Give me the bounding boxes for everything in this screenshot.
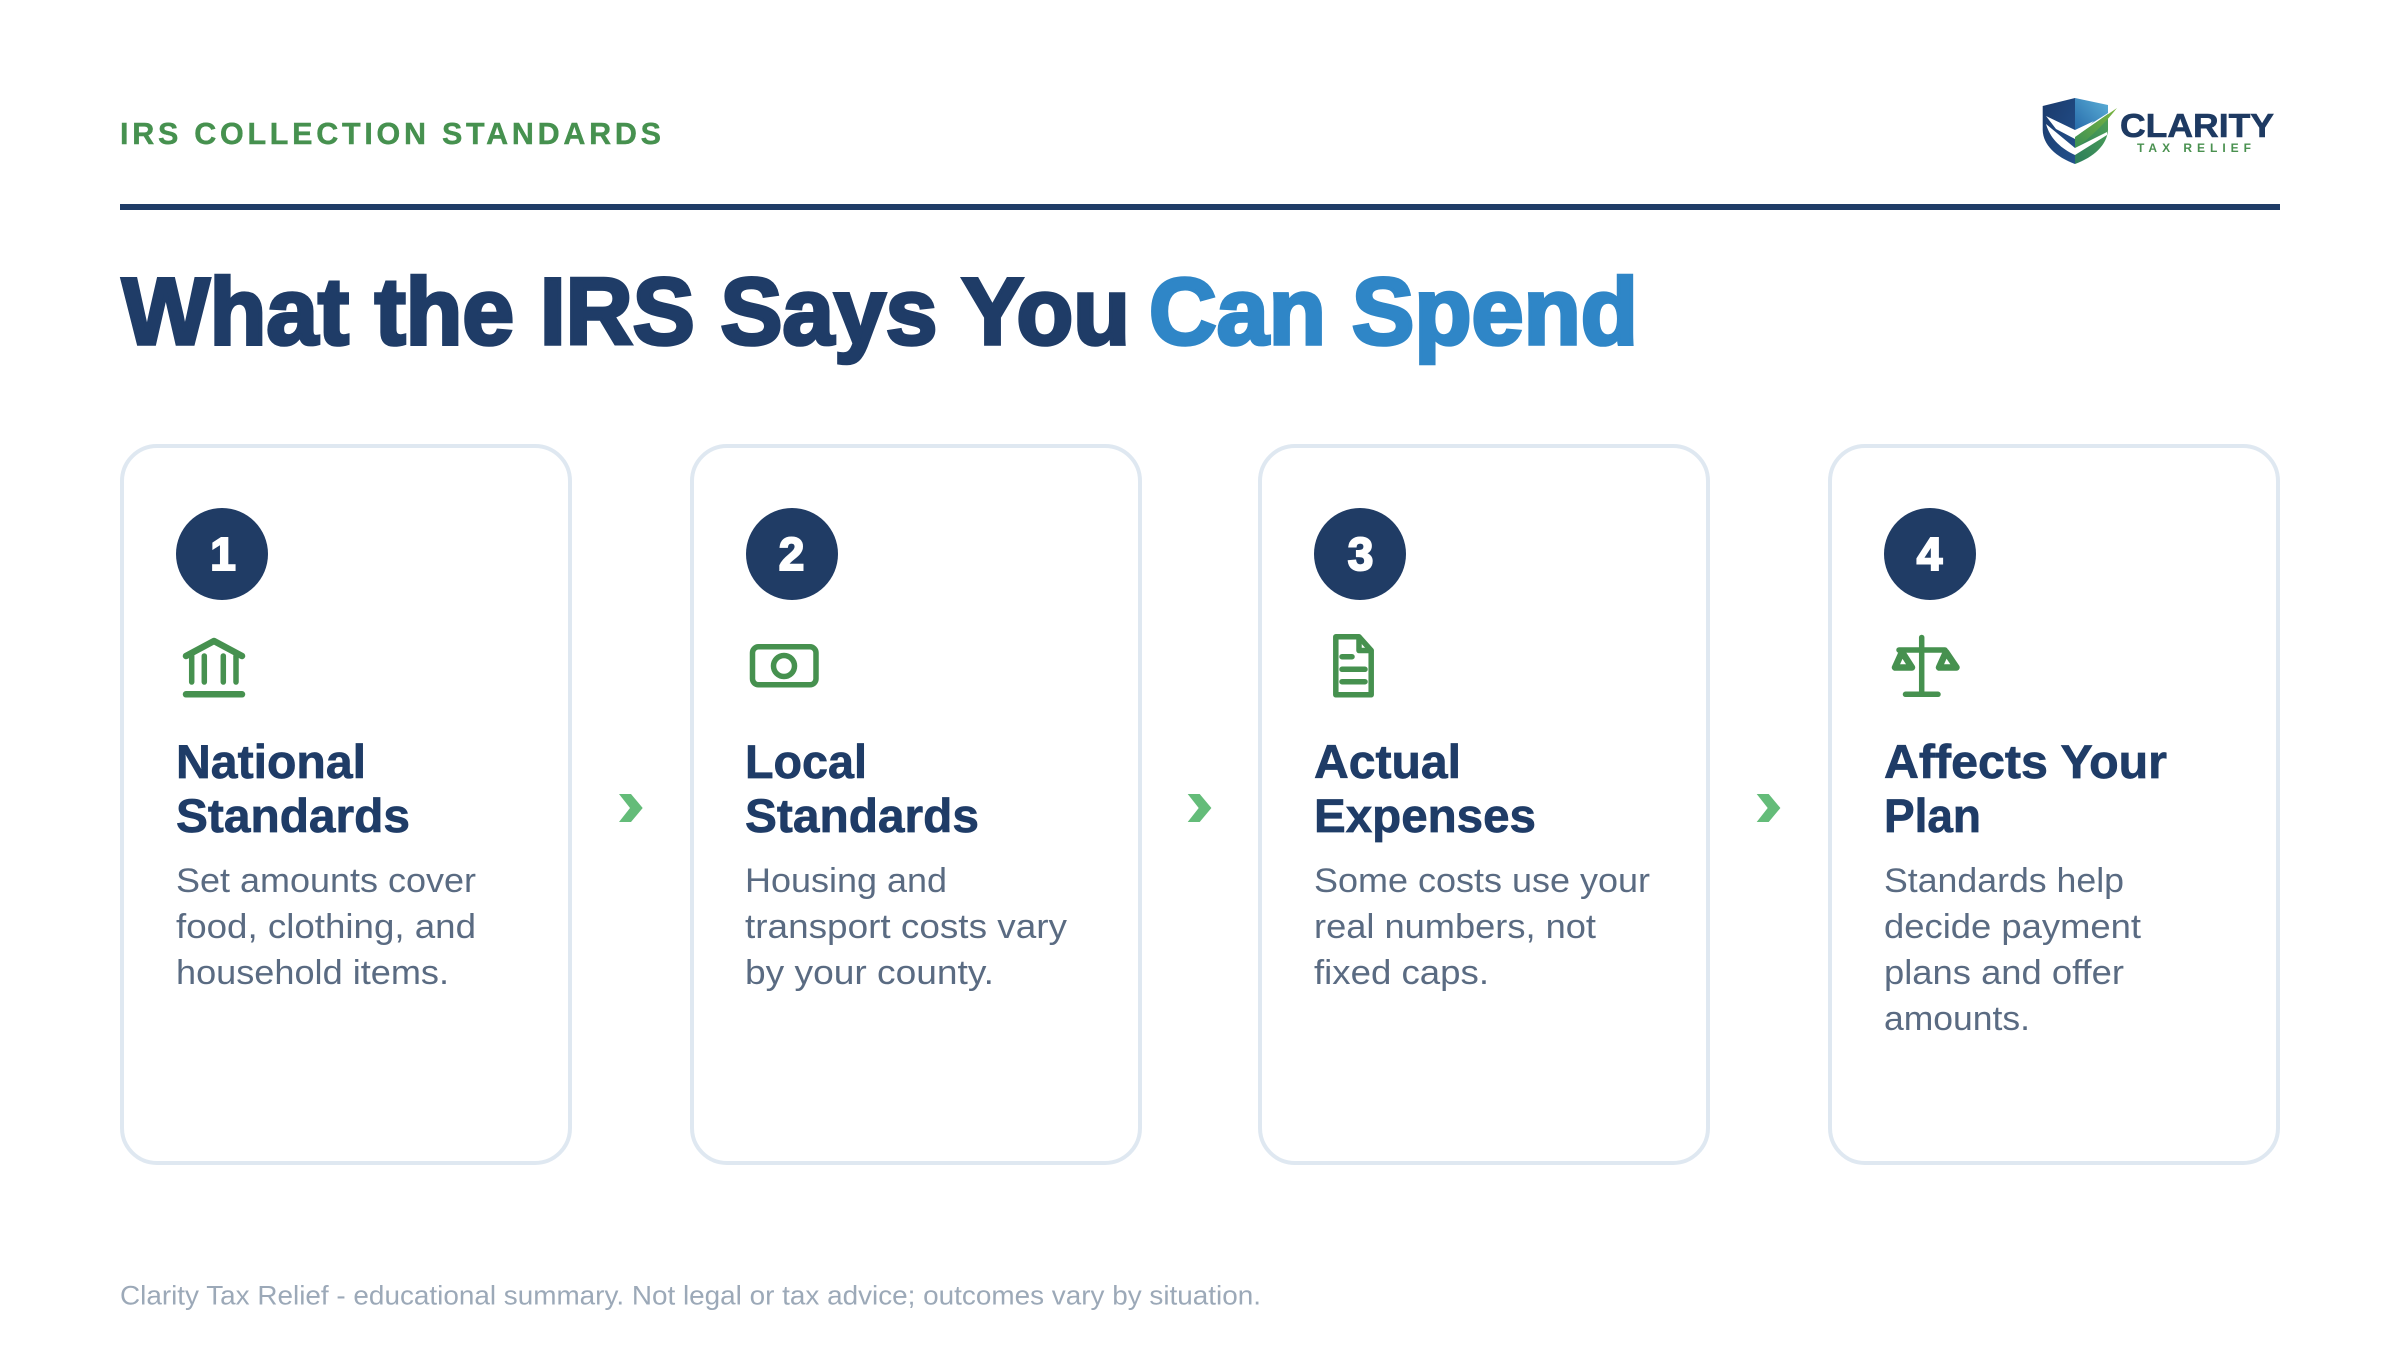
card body text: decide payment xyxy=(1884,908,2141,946)
step number 1: 1 xyxy=(210,528,236,580)
logo: Clarity Tax Relief xyxy=(2043,98,2274,164)
card body text xyxy=(176,862,476,992)
card heading xyxy=(1314,735,1536,842)
card outline xyxy=(1830,446,2278,1163)
card body text: household items. xyxy=(176,954,449,992)
card body text xyxy=(1314,862,1650,992)
arrow 3 xyxy=(1757,794,1780,822)
card body text xyxy=(1884,862,2141,1038)
card heading: Standards xyxy=(745,789,979,842)
card body text: fixed caps. xyxy=(1314,954,1489,992)
panel: National Standards xyxy=(122,446,570,1163)
step number 1 xyxy=(176,508,268,600)
card heading xyxy=(745,735,979,842)
card body text xyxy=(745,862,1068,992)
card outline xyxy=(1260,446,1708,1163)
kicker: IRS Collection Standards: IRS COLLECTION STANDARDS xyxy=(120,117,661,151)
card body text: Some costs use your xyxy=(1314,862,1650,900)
logo shield xyxy=(2043,98,2117,164)
card heading: Plan xyxy=(1884,789,1981,842)
card body text: Standards help xyxy=(1884,862,2124,900)
step number 4: 4 xyxy=(1917,528,1943,580)
title xyxy=(122,259,1638,365)
step number 3: 3 xyxy=(1348,528,1373,580)
step number 3 xyxy=(1314,508,1406,600)
header rule xyxy=(120,204,2280,210)
logo tagline: TAX RELIEF xyxy=(2137,141,2251,155)
card body text: real numbers, not xyxy=(1314,908,1596,946)
card heading: Local xyxy=(745,735,867,788)
card outline xyxy=(122,446,570,1163)
panel: Local Standards xyxy=(692,446,1140,1163)
panel: Affects Your Plan xyxy=(1830,446,2278,1163)
step number 2 xyxy=(746,508,838,600)
icon: bank building xyxy=(186,641,242,694)
logo wordmark: CLARITY xyxy=(2120,107,2274,144)
card body text: by your county. xyxy=(745,954,994,992)
panel: Actual Expenses xyxy=(1260,446,1708,1163)
card body text: food, clothing, and xyxy=(176,908,476,946)
icon: balance scale xyxy=(1895,638,1956,694)
arrow 2 xyxy=(1188,794,1211,822)
icon: banknote xyxy=(752,647,816,685)
card outline xyxy=(692,446,1140,1163)
card body text: transport costs vary xyxy=(745,908,1068,946)
icon: document xyxy=(1336,637,1371,695)
card heading: Actual xyxy=(1314,735,1461,788)
card heading xyxy=(1884,735,2167,842)
card heading xyxy=(176,735,410,842)
footer disclaimer: Clarity Tax Relief - educational summary. Not legal or tax advice; outcomes vary by situation. xyxy=(120,1280,1261,1310)
card heading: Standards xyxy=(176,789,410,842)
arrow 1 xyxy=(619,794,643,822)
title: What the IRS Says You xyxy=(122,259,1130,365)
card body text: amounts. xyxy=(1884,1000,2030,1038)
card heading: Expenses xyxy=(1314,789,1536,842)
step number 4 xyxy=(1884,508,1976,600)
card heading: National xyxy=(176,735,366,788)
card body text: plans and offer xyxy=(1884,954,2124,992)
card body text: Housing and xyxy=(745,862,947,900)
title highlight: Can Spend: Can Spend xyxy=(1149,259,1638,365)
card heading: Affects Your xyxy=(1884,735,2167,788)
card body text: Set amounts cover xyxy=(176,862,476,900)
step number 2: 2 xyxy=(779,528,804,580)
